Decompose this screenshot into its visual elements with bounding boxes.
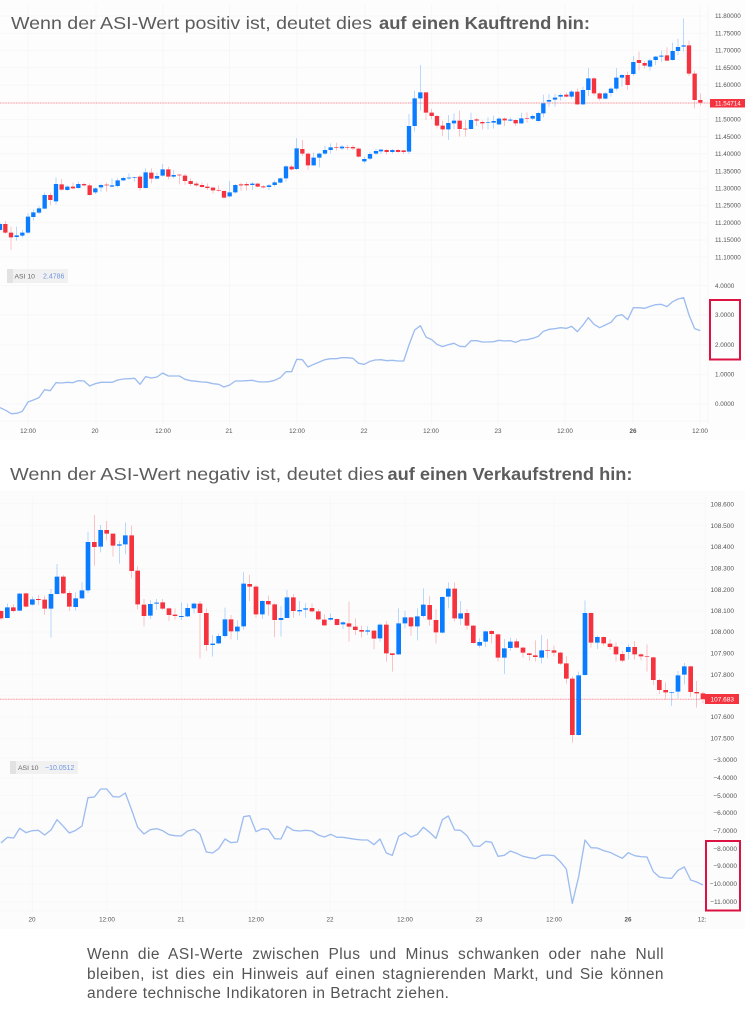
- time axis labels: 23: [475, 917, 483, 924]
- price line: [0, 102, 710, 104]
- ASI legend: ASI 10: [18, 765, 39, 772]
- ASI line: [1, 789, 703, 903]
- ASI axis labels: −9.0000: [713, 863, 737, 870]
- current price tag: 107.683: [710, 696, 734, 703]
- time axis labels: 23: [494, 428, 502, 435]
- heading: positive ASI: auf einen Kauftrend hin:: [379, 13, 590, 33]
- time axis labels: 21: [177, 917, 185, 924]
- paragraph: stagnating market note: Wenn die ASI-Werte zwischen Plus und Minus schwanken oder nahe Null: [87, 946, 664, 963]
- price axis labels: 107.600: [710, 714, 734, 721]
- ASI axis labels: −6.0000: [713, 810, 737, 817]
- price axis labels: 11.25000: [715, 203, 741, 210]
- time axis labels: 12:00: [557, 428, 573, 435]
- price axis labels: 11.50000: [715, 117, 741, 124]
- price axis labels: 11.60000: [715, 82, 741, 89]
- chart panel: downward trend: [0, 497, 740, 924]
- time axis labels: 12:00: [99, 917, 115, 924]
- time axis labels: 12:00: [20, 428, 36, 435]
- heading: negative ASI: [10, 464, 632, 484]
- price axis labels: 108.300: [710, 566, 734, 572]
- price axis labels: 11.65000: [715, 65, 741, 72]
- time axis labels: 26: [624, 917, 632, 924]
- time axis labels: 12:00: [692, 428, 708, 435]
- price axis labels: 11.45000: [715, 134, 741, 141]
- price axis labels: 107.500: [710, 736, 734, 742]
- price axis labels: 108.200: [710, 587, 734, 594]
- price axis labels: 11.40000: [715, 151, 741, 158]
- price axis labels: 107.900: [710, 650, 734, 657]
- heading: positive ASI: Wenn der ASI-Wert positiv ist, deutet dies: [11, 13, 372, 33]
- paragraph: stagnating market note: andere technische Indikatoren in Betracht ziehen.: [87, 985, 449, 1002]
- time axis labels: 12:00: [546, 917, 562, 924]
- ASI axis labels: −4.0000: [713, 775, 737, 782]
- ASI axis labels: 2.0000: [715, 342, 735, 349]
- ASI legend: 2.4786: [43, 274, 65, 280]
- price axis labels: [715, 13, 741, 261]
- highlight box: negative ASI values: [706, 841, 740, 910]
- ASI axis labels: 0.0000: [715, 401, 735, 408]
- current price tag: 11.54714: [715, 100, 741, 107]
- ASI legend: −10.0512: [45, 765, 74, 772]
- ASI legend: ASI 10: [14, 274, 35, 280]
- ASI axis labels: [715, 283, 735, 408]
- current price tag: [710, 99, 745, 108]
- price axis labels: 108.500: [710, 523, 734, 530]
- paragraph: stagnating market note: bleiben, ist dies ein Hinweis auf einen stagnierenden Markt, und Sie können: [87, 966, 664, 983]
- time axis labels: 20: [28, 917, 36, 924]
- time axis labels: 20: [91, 428, 99, 435]
- time axis labels: 26: [629, 428, 637, 435]
- price axis labels: 11.80000: [715, 13, 741, 20]
- ASI axis labels: −5.0000: [713, 793, 737, 800]
- time axis labels: [20, 428, 708, 435]
- time axis labels: 12:00: [155, 428, 171, 435]
- heading: negative ASI: Wenn der ASI-Wert negativ ist, deutet dies: [10, 464, 384, 484]
- ASI axis labels: 1.0000: [715, 372, 735, 378]
- time axis labels: 12:00: [289, 428, 305, 435]
- paragraph: stagnating market note: [87, 946, 664, 1002]
- price axis labels: 11.70000: [715, 48, 741, 55]
- price axis labels: 108.400: [710, 544, 734, 551]
- ASI axis labels: [710, 757, 737, 906]
- ASI line: [0, 298, 700, 414]
- ASI axis labels: −8.0000: [713, 846, 737, 853]
- price axis labels: 11.15000: [715, 237, 741, 244]
- current price tag: [705, 694, 739, 704]
- price axis labels: [710, 502, 734, 742]
- heading: positive ASI: [11, 13, 590, 33]
- heading: negative ASI: auf einen Verkaufstrend hin:: [388, 464, 632, 484]
- price axis labels: 108.000: [710, 629, 734, 636]
- time axis labels: 12:00: [248, 917, 264, 924]
- ASI legend: [10, 761, 78, 774]
- time axis labels: 12:00: [423, 428, 439, 435]
- ASI legend: [7, 269, 68, 283]
- chart panel: upward trend: [0, 5, 745, 435]
- time axis labels: 21: [225, 428, 233, 435]
- price axis labels: 108.600: [710, 502, 734, 509]
- price axis labels: 11.30000: [715, 186, 741, 192]
- candlesticks: [0, 18, 700, 250]
- ASI axis labels: 3.0000: [715, 312, 735, 319]
- price axis labels: 107.800: [710, 672, 734, 679]
- ASI axis labels: −7.0000: [713, 828, 737, 835]
- time axis labels: 22: [326, 917, 334, 924]
- price axis labels: 11.35000: [715, 168, 741, 175]
- ASI axis labels: −3.0000: [713, 757, 737, 764]
- ASI axis labels: 4.0000: [715, 283, 735, 290]
- price axis labels: 108.100: [710, 608, 734, 615]
- time axis labels: 22: [360, 428, 368, 435]
- ASI axis labels: −10.0000: [710, 881, 737, 888]
- ASI axis labels: −11.0000: [710, 899, 737, 906]
- highlight box: positive ASI values: [710, 300, 740, 360]
- time axis labels: 12:00: [397, 917, 413, 924]
- price axis labels: 11.75000: [715, 30, 741, 37]
- price axis labels: 11.20000: [715, 220, 741, 227]
- time axis labels: 12:: [698, 917, 707, 924]
- price line: [0, 698, 706, 700]
- price axis labels: 11.10000: [715, 254, 741, 261]
- candlesticks: [1, 515, 703, 743]
- time axis labels: [28, 917, 707, 924]
